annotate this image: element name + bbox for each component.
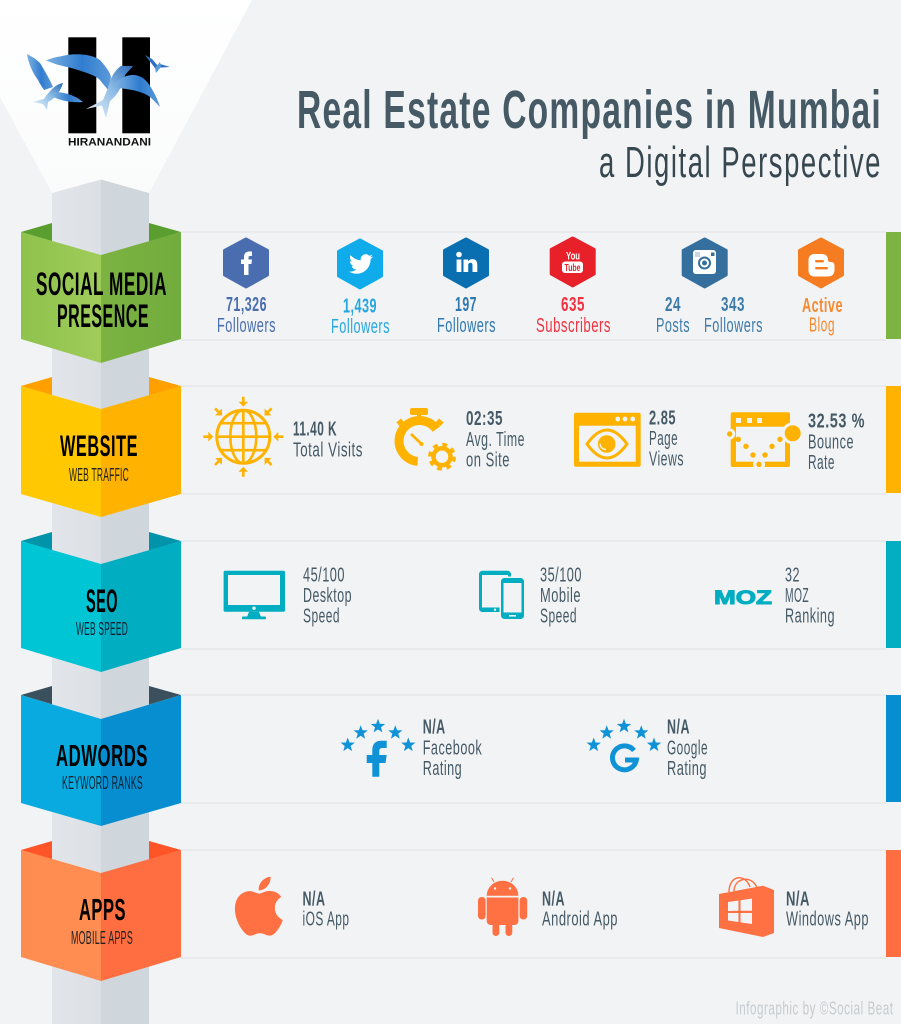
- stat: linkedin followers: [437, 293, 496, 337]
- stat: mobile speed: 35/100: [540, 564, 582, 587]
- stat: twitter followers: 1,439: [343, 294, 377, 318]
- stat: youtube subscribers: Subscribers: [536, 314, 611, 337]
- stat: bounce rate: Bounce: [808, 430, 854, 453]
- stat: facebook followers: 71,326: [226, 293, 267, 316]
- title: [297, 80, 882, 187]
- stat: mobile speed: Speed: [540, 604, 577, 627]
- stat: instagram posts: [656, 293, 690, 337]
- stat: bounce rate: [808, 410, 865, 474]
- ribbon: apps: APPS: [79, 892, 126, 927]
- icon: youtube: You: [566, 250, 580, 262]
- icon: apple: [235, 877, 283, 936]
- ribbon: adwords: KEYWORD RANKS: [62, 773, 143, 793]
- logo: Hiranandani: [27, 37, 170, 149]
- stat: bounce rate: Rate: [808, 451, 835, 474]
- icon: google rating stars: [587, 719, 661, 770]
- stat: ios app: iOS App: [302, 908, 350, 931]
- panel: seo: [21, 540, 901, 672]
- stat: average time on site: [466, 407, 525, 472]
- icon: facebook: [224, 239, 268, 287]
- ribbon: website: WEB TRAFFIC: [69, 465, 129, 485]
- ribbon: adwords: [21, 695, 181, 826]
- stat: page views: 2.85: [649, 406, 676, 429]
- stat: instagram followers: 343: [721, 293, 745, 316]
- stat: ios app: [302, 888, 350, 931]
- icon: facebook rating stars: [341, 719, 415, 777]
- stat: facebook followers: [217, 293, 276, 337]
- stat: android app: Android App: [542, 908, 618, 931]
- stat: bounce rate: 32.53 %: [808, 410, 865, 433]
- stat: desktop speed: Desktop: [303, 584, 352, 607]
- stat: instagram followers: Followers: [704, 314, 763, 337]
- stat: mobile speed: [540, 564, 582, 627]
- stat: facebook rating: Facebook: [423, 736, 482, 759]
- stat: youtube subscribers: 635: [561, 293, 585, 316]
- ribbon: social media: PRESENCE: [57, 298, 149, 334]
- stat: moz ranking: [785, 564, 835, 627]
- panel: adwords: [21, 694, 901, 826]
- icon: moz logo: MOZ: [714, 587, 772, 609]
- ribbon: apps: [21, 850, 181, 981]
- stat: total visits: 11.40 K: [293, 418, 337, 441]
- icon: globe with arrows: [203, 397, 283, 477]
- stat: instagram followers: [704, 293, 763, 337]
- icon: instagram: [683, 239, 726, 287]
- stat: instagram posts: Posts: [656, 314, 690, 337]
- ribbon: seo: WEB SPEED: [76, 619, 128, 639]
- icon: blogger: [800, 239, 842, 287]
- panel: social media presence: [21, 231, 901, 363]
- icon: twitter: [338, 240, 382, 288]
- stat: google rating: [667, 715, 708, 780]
- stat: mobile speed: Mobile: [540, 584, 581, 607]
- icon: desktop monitor: [224, 571, 285, 619]
- ribbon: seo: SEO: [86, 583, 118, 619]
- stat: average time on site: on Site: [466, 449, 510, 472]
- stat: google rating: N/A: [667, 715, 690, 738]
- stat: windows app: N/A: [786, 888, 810, 911]
- stat: ios app: N/A: [302, 888, 326, 911]
- icon: stopwatch: [396, 408, 454, 469]
- stat: moz ranking: 32: [785, 564, 800, 587]
- ribbon back flaps: [21, 223, 181, 874]
- stat: total visits: Total Visits: [293, 439, 363, 462]
- stat: desktop speed: 45/100: [303, 564, 345, 587]
- stat: facebook followers: Followers: [217, 314, 276, 337]
- panel: apps: [21, 849, 901, 981]
- stat: total visits: [293, 418, 363, 462]
- icon: youtube: [551, 238, 594, 286]
- spotlight behind logo: [0, 0, 252, 193]
- stat: active blog: Active: [802, 294, 843, 317]
- stat: linkedin followers: 197: [455, 293, 477, 316]
- stat: instagram posts: 24: [665, 293, 681, 316]
- stat: facebook rating: Rating: [423, 757, 462, 780]
- stat: android app: N/A: [542, 888, 565, 911]
- stat: google rating: Google: [667, 736, 708, 759]
- icon: youtube: Tube: [564, 262, 581, 274]
- stat: page views: [649, 406, 684, 471]
- central column: [52, 180, 149, 1024]
- stat: facebook rating: [423, 715, 482, 780]
- stat: facebook rating: N/A: [423, 715, 446, 738]
- stat: page views: Views: [649, 448, 684, 471]
- stat: average time on site: 02:35: [466, 407, 503, 430]
- stat: android app: [542, 888, 618, 931]
- ribbon: social media: SOCIAL MEDIA: [36, 266, 167, 302]
- stat: linkedin followers: Followers: [437, 314, 496, 337]
- stat: twitter followers: Followers: [331, 315, 390, 338]
- icon: linkedin: [444, 239, 488, 287]
- ribbon: social media: [21, 232, 181, 363]
- stat: twitter followers: [331, 294, 390, 338]
- ribbon: seo: [21, 541, 181, 672]
- stat: desktop speed: [303, 564, 352, 627]
- ribbon: apps: MOBILE APPS: [71, 928, 133, 948]
- stat: active blog: Blog: [809, 314, 835, 336]
- ribbon: website: [21, 386, 181, 517]
- stat: google rating: Rating: [667, 757, 707, 780]
- stat: desktop speed: Speed: [303, 604, 340, 627]
- icon: bounce rate: [724, 412, 804, 470]
- stat: moz ranking: MOZ: [785, 584, 809, 607]
- ribbon: website: WEBSITE: [60, 430, 138, 463]
- stat: windows app: [786, 888, 869, 931]
- icon: android: [478, 878, 527, 936]
- icon: tablet and phone: [479, 571, 526, 620]
- stat: active blog: [802, 294, 843, 336]
- stat: average time on site: Avg. Time: [466, 428, 525, 451]
- icon: browser with eye: [574, 413, 641, 467]
- logo wordmark: HIRANANDANI: [68, 137, 151, 149]
- panel: website: [21, 385, 901, 517]
- icon: windows store bag: [719, 878, 774, 937]
- stat: moz ranking: Ranking: [785, 604, 835, 627]
- stat: page views: Page: [649, 427, 678, 450]
- ribbon: adwords: ADWORDS: [56, 738, 148, 773]
- stat: youtube subscribers: [536, 293, 611, 337]
